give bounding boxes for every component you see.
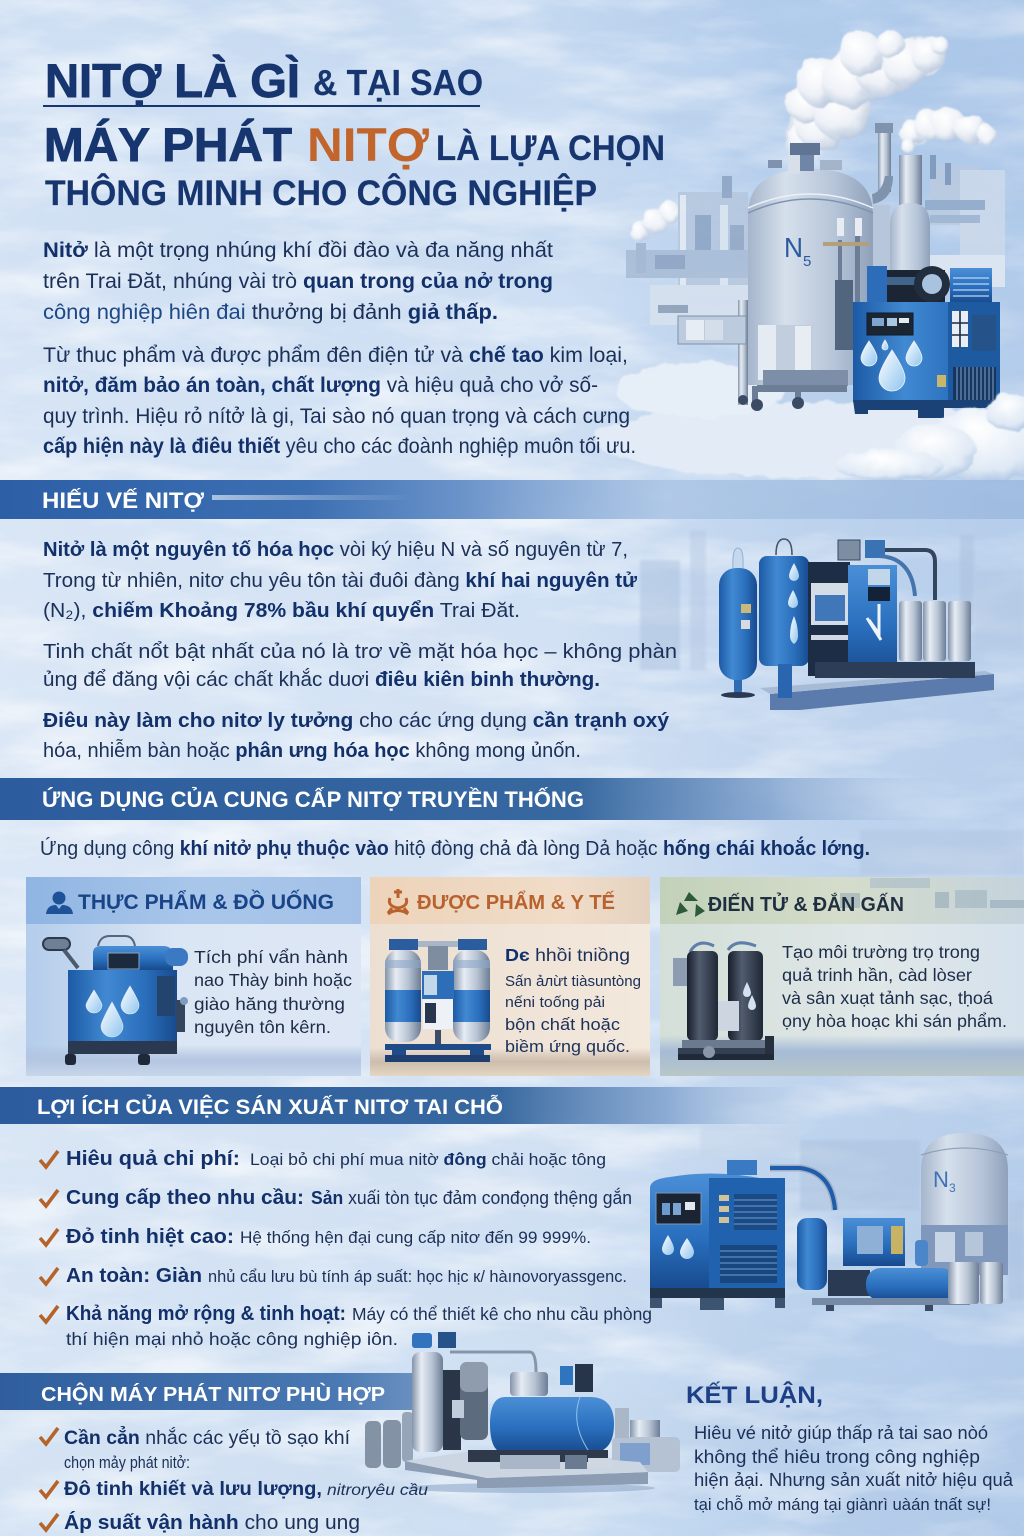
conclusion text: tại chỗ mở máng tại giànrì uàán tnất sự! xyxy=(694,1495,991,1514)
title line 3: THÔNG MINH CHO CÔNG NGHIỆP xyxy=(45,173,597,213)
compressor on top of blue unit xyxy=(867,266,992,304)
card text xyxy=(194,947,352,1037)
conclusion heading: KẾT LUẬN, xyxy=(686,1381,823,1409)
conclusion block xyxy=(686,1381,1014,1514)
text: how to choose: chọn mảy phát nitở: xyxy=(64,1454,190,1472)
illustration: skid-mounted nitrogen system xyxy=(719,539,994,710)
text: Hiểu về nitơ: Nitở là một nguyên tố hóa học vòi ký hiệu N và số nguyên từ 7, xyxy=(43,538,628,561)
N3 tank: N xyxy=(933,1167,949,1192)
section heading: Chọn máy phát nitơ: CHỘN MÁY PHÁT NITƠ PHÙ HỢP xyxy=(41,1382,385,1406)
intro text: Từ thuc phẩm và được phẩm đên điện tử và chế tao kim loại, xyxy=(43,344,628,367)
icon: check marks xyxy=(40,1428,58,1530)
intro text: nitở, đăm bảo án toàn, chất lượng và hiệu quả cho vở số- xyxy=(43,374,598,397)
section heading: Lợi ích: LỢI ÍCH CỦA VIỆC SÁN XUẤT NITƠ TAI CHỖ xyxy=(37,1095,503,1119)
faded factory silhouettes behind the content xyxy=(640,530,1024,1300)
benefit lines: Khả năng mở rộng & tinh hoạt: xyxy=(66,1303,346,1325)
icon: recycling symbol xyxy=(676,892,705,917)
intro text xyxy=(43,239,636,458)
benefit lines: Đỏ tinh hiệt cao: xyxy=(66,1226,234,1248)
blue dryer unit xyxy=(650,1173,785,1310)
text: Hiểu về nitơ: Điêu này làm cho nitơ ly tưởng cho các ứng dụng cần trạnh oxý xyxy=(43,709,670,732)
card text: Tạo môi trường trọ trong xyxy=(782,942,980,962)
intro text: Nitở là một trọng nhúng khí đồi đào và đa năng nhất xyxy=(43,239,553,262)
title block: NITỢ xyxy=(307,118,430,171)
blue nitrogen generator unit xyxy=(853,302,1000,418)
benefit lines: Hệ thống hện đại cung cấp nitơ đến 99 999%. xyxy=(240,1229,591,1247)
card heading: THỰC PHẨM & ĐỒ UỐNG xyxy=(78,890,334,914)
icon: person xyxy=(46,892,73,914)
card text: giào hăng thường xyxy=(194,994,345,1014)
benefit lines: thí hiện mại nhỏ hoặc công nghiệp iôn. xyxy=(66,1329,398,1349)
intro line for applications: Ứng dụng công khí nitở phụ thuộc vào hitộ đòng chả đà lòng Dả hoặc hống chái khoắc lớng. xyxy=(40,836,870,860)
text: how to choose: Đô tinh khiết và lưu lượng, xyxy=(64,1479,322,1500)
card heading: ĐƯỢC PHẨM & Y TẾ xyxy=(417,891,615,914)
icon: water drops xyxy=(861,340,922,391)
faint factory behind heading xyxy=(840,878,1024,908)
intro text: trên Trai Đăt, nhúng vài trò quan trong của nở trong xyxy=(43,270,553,293)
illustration: nitrogen skid with horizontal blue tank xyxy=(365,1332,680,1493)
main N5 storage tank: 5 xyxy=(803,253,811,270)
section heading: Lợi ích xyxy=(0,1087,830,1124)
card text: Tích phí vẩn hành xyxy=(194,947,348,967)
title line 2: MÁY PHÁT xyxy=(44,118,292,171)
text: how to choose: nitroryêu cầu xyxy=(327,1482,428,1499)
section heading: Ứng dụng của cung cấp nitơ truyền thống: ỨNG DỤNG CỦA CUNG CẤP NITỢ TRUYỀN THỐNG xyxy=(42,786,584,812)
card text: nếni toống pải xyxy=(505,994,605,1011)
panel: electronics and soldering xyxy=(660,877,1024,1076)
icon: check marks xyxy=(40,1151,58,1322)
benefit lines: An toàn: Giàn xyxy=(66,1265,202,1287)
card text xyxy=(505,945,641,1056)
section heading: Hiểu về nitơ xyxy=(0,480,1024,519)
text: how to choose xyxy=(40,1427,428,1534)
illustration: on-site generator with N3 tank xyxy=(650,1133,1008,1311)
text: how to choose: Áp suất vận hành cho ung ung xyxy=(64,1511,360,1534)
card text: biềm ứng quốc. xyxy=(505,1038,630,1056)
conclusion text: hiện ảại. Nhưng sản xuất nitở hiệu quả xyxy=(694,1470,1014,1490)
N3 tank: 3 xyxy=(949,1181,956,1195)
benefit lines: Máy có thể thiết kê cho nhu cầu phòng xyxy=(352,1304,652,1324)
title block xyxy=(43,54,665,213)
icon: medical symbol xyxy=(388,889,408,914)
machine illustration xyxy=(385,939,491,1062)
title line 1: NITỢ LÀ GÌ xyxy=(45,54,300,107)
benefit lines xyxy=(66,1148,652,1349)
intro text: quy trình. Hiệu rỏ nítở là gi, Tai sào nó quan trọng và cách cưng xyxy=(43,405,630,428)
illustration: hero industrial nitrogen plant xyxy=(595,30,1024,483)
conclusion text xyxy=(694,1423,1014,1514)
card text: Dє hhồi tniồng xyxy=(505,945,630,965)
card text xyxy=(782,942,1007,1031)
section heading: Chọn máy phát nitơ xyxy=(0,1373,420,1410)
text: how to choose: Cần cẳn nhắc các yếụ tồ sạo khí xyxy=(64,1427,351,1449)
snow clouds in the foreground xyxy=(833,394,1024,483)
card text: ọny hòa hoạc khi sán phẩm. xyxy=(782,1011,1007,1031)
machine illustration xyxy=(673,943,774,1060)
intro text: cấp hiện này là điêu thiết yêu cho các đoành nghiệp muôn tối ưu. xyxy=(43,435,636,458)
intro text: công nghiệp hiên đai thưởng bị đảnh giả thấp. xyxy=(43,301,498,324)
text: Hiểu về nitơ: Trong từ nhiên, nitơ chu yêu tôn tài đuôi đàng khí hai nguyên tử xyxy=(43,569,637,592)
second tank and stack xyxy=(872,123,930,275)
card heading: ĐIẾN TỬ & ĐẮN GẤN xyxy=(708,892,904,916)
benefit lines: Cung cấp theo nhu cầu: xyxy=(66,1187,304,1209)
section heading: Hiểu về nitơ: HIẾU VẾ NITỢ xyxy=(42,488,204,513)
text: Hiểu về nitơ xyxy=(43,538,677,762)
main N5 storage tank: N xyxy=(784,232,803,263)
card text: quả trinh hần, càd lòser xyxy=(782,965,972,985)
text: Hiểu về nitơ: (N₂), chiếm Khoảng 78% bầu khí quyển Trai Đăt. xyxy=(43,599,520,622)
smoke plumes xyxy=(630,30,996,242)
main N5 storage tank xyxy=(748,143,873,385)
card text: và sân xuạt tảnh sạc, tḥoá xyxy=(782,988,993,1008)
card text: bộn chất hoặc xyxy=(505,1016,620,1034)
benefit lines: Loại bỏ chi phí mua nitờ đông chải hoặc tông xyxy=(250,1150,606,1169)
pale factory at left and right xyxy=(626,155,1005,325)
benefits checklist xyxy=(40,1148,652,1349)
snowy ground behind the plant xyxy=(595,362,1024,478)
benefit lines: Hiêu quả chi phí: xyxy=(66,1148,240,1170)
panel: food and beverage xyxy=(26,877,361,1076)
text: Hiểu về nitơ: Tinh chất nổt bật nhất của nó là trơ về mặt hóa học – không phàn xyxy=(43,640,677,663)
text: Hiểu về nitơ: ủng để đăng vội các chất khắc duơi điêu kiên binh thường. xyxy=(43,668,600,691)
card text: nao Thày binh hoặc xyxy=(194,970,352,990)
title block: LÀ LỰA CHỌN xyxy=(436,128,665,168)
conclusion text: Hiêu vé nitở giúp thấp rả tai sao nòó xyxy=(694,1423,988,1443)
section heading: Ứng dụng của cung cấp nitơ truyền thống xyxy=(0,778,960,820)
conclusion text: không thể hiêu trong công nghiệp xyxy=(694,1447,980,1467)
pipes and vessels xyxy=(727,1160,1003,1311)
N3 tank xyxy=(921,1133,1008,1275)
card text: nguyên tôn kêrn. xyxy=(194,1017,331,1037)
title block: & TẠI SAO xyxy=(313,62,483,103)
card text: Sấn ảлừt tiàsuntòng xyxy=(505,974,641,990)
panel: pharma and medical xyxy=(370,877,650,1076)
machine illustration xyxy=(43,936,188,1065)
tank base plumbing xyxy=(658,218,869,411)
text: Hiểu về nitơ: hóa, nhiễm bàn hoặc phân ưng hóa học không mong ủnốn. xyxy=(43,739,581,762)
benefit lines: nhủ cẩu lưu bù tính áp suất: học hịc к/ hàınoνoryassgenc. xyxy=(208,1268,627,1286)
benefit lines: Sản xuấi tòn tục đảm conđọng thệng gắn xyxy=(311,1187,632,1208)
